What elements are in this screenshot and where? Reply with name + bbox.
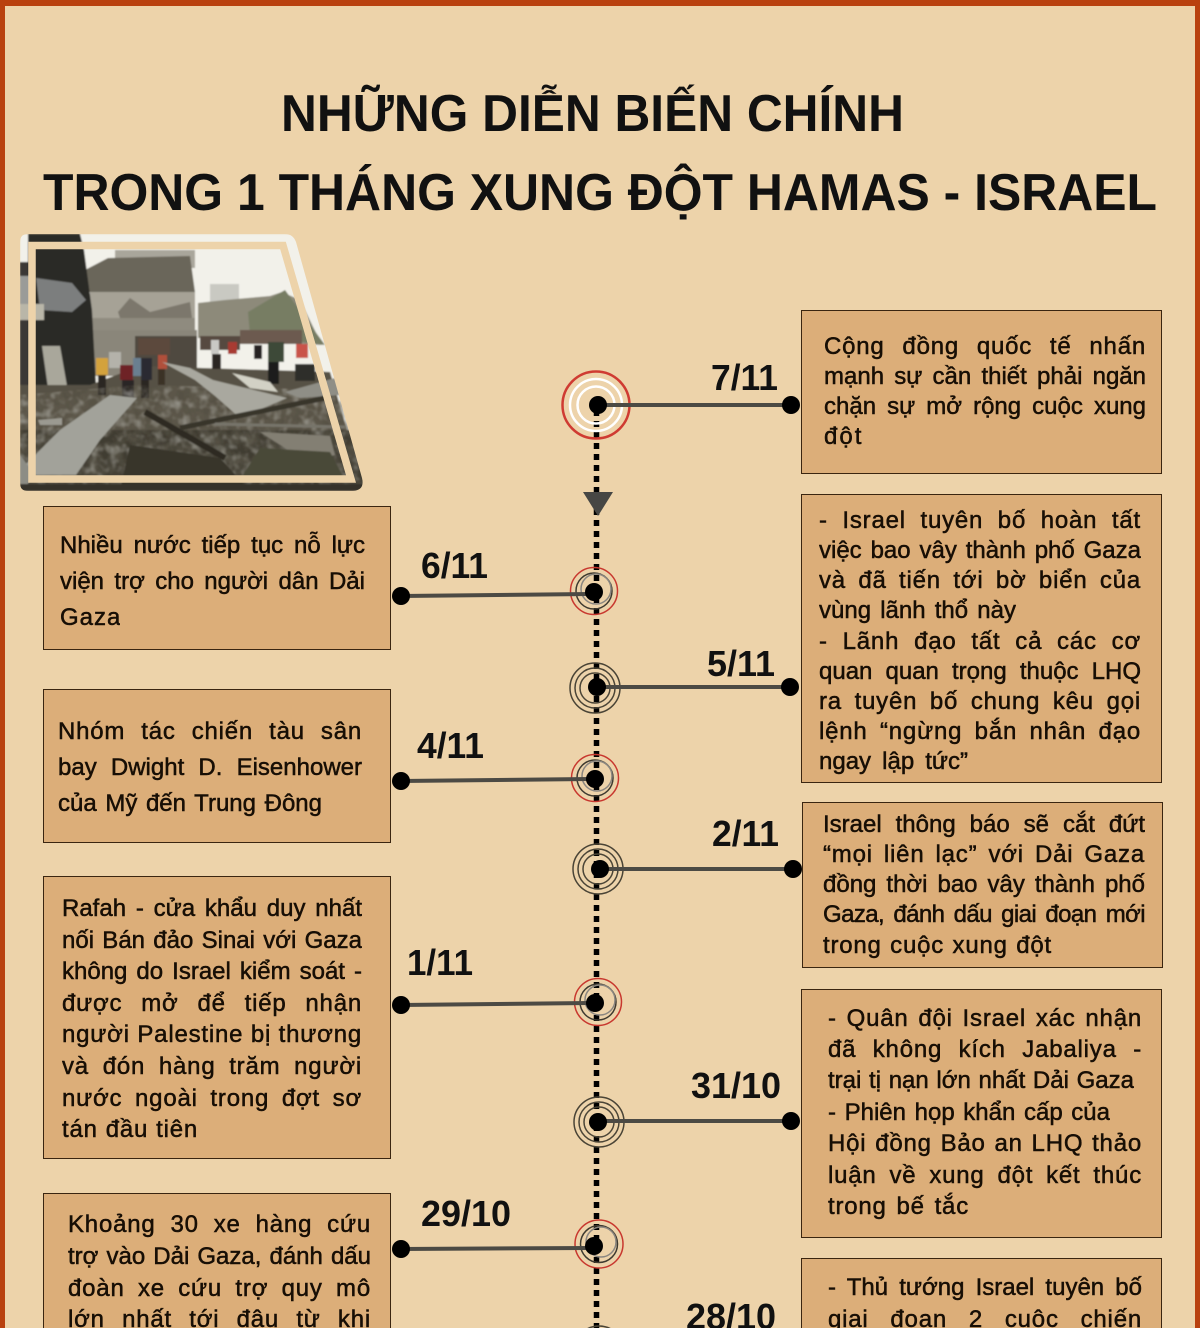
- panel: 5/11: ra tuyên bố chung kêu gọi: [819, 688, 1141, 715]
- panel: 1/11: và đón hàng trăm người: [62, 1053, 362, 1080]
- panel: 1/11: không do Israel kiểm soát -: [62, 958, 362, 985]
- panel: 4/11: của Mỹ đến Trung Đông: [58, 790, 322, 817]
- panel: 31/10: - Quân đội Israel xác nhận: [828, 1005, 1142, 1032]
- date: 29/10: 29/10: [421, 1193, 511, 1234]
- date: 6/11: 6/11: [421, 545, 488, 586]
- panel: 1/11: tán đầu tiên: [62, 1116, 198, 1143]
- panel: 2/11: trong cuộc xung đột: [823, 932, 1052, 959]
- panel: 7/11: đột: [824, 423, 863, 450]
- panel: 31/10: luận về xung đột kết thúc: [828, 1162, 1142, 1189]
- panel: 6/11: viện trợ cho người dân Dải: [60, 568, 365, 595]
- title: TRONG 1 THÁNG XUNG ĐỘT HAMAS - ISRAEL: [43, 163, 1157, 222]
- panel: 2/11: [802, 802, 1163, 968]
- panel: 4/11: Nhóm tác chiến tàu sân: [58, 718, 362, 745]
- panel: 1/11: Rafah - cửa khẩu duy nhất: [62, 895, 362, 922]
- panel: 5/11: việc bao vây thành phố Gaza: [819, 537, 1141, 564]
- photo: destroyed buildings in Gaza with frame: [20, 234, 365, 491]
- panel: 6/11: Gaza: [60, 604, 120, 631]
- title: [43, 84, 1157, 222]
- panel: 1/11: nước ngoài trong đợt sơ: [62, 1085, 362, 1112]
- panel: 5/11: quan quan trọng thuộc LHQ: [819, 658, 1141, 685]
- panel: 5/11: - Israel tuyên bố hoàn tất: [819, 507, 1141, 534]
- panel: 7/11: chặn sự mở rộng cuộc xung: [824, 393, 1146, 420]
- panel: 4/11: bay Dwight D. Eisenhower: [58, 754, 362, 781]
- node: 29/10: [392, 1220, 623, 1268]
- panel: 1/11: [43, 876, 391, 1159]
- node: 1/11: [392, 978, 622, 1026]
- date: 1/11: 1/11: [407, 942, 473, 983]
- metal sheets: [162, 362, 287, 418]
- panel: 5/11: [801, 494, 1162, 783]
- panel: 5/11: ngay lập tức”: [819, 748, 968, 775]
- panel: 31/10: [801, 989, 1162, 1238]
- node: 31/10: [574, 1097, 800, 1147]
- panel: 6/11: [43, 506, 391, 650]
- panel: 5/11: vùng lãnh thổ này: [819, 597, 1016, 624]
- panel: 29/10: [43, 1193, 391, 1328]
- panel: 5/11: - Lãnh đạo tất cả các cơ: [819, 628, 1141, 655]
- crowd: [96, 330, 315, 398]
- panel: 1/11: được mở để tiếp nhận: [62, 990, 362, 1017]
- node: 2/11: [573, 844, 802, 894]
- dotted timeline spine: [594, 410, 599, 1328]
- panel: 2/11: Israel thông báo sẽ cắt đứt: [823, 811, 1145, 838]
- panel: 29/10: đoàn xe cứu trợ quy mô: [68, 1275, 371, 1302]
- panel: 28/10: [801, 1258, 1162, 1328]
- node: 4/11: [392, 754, 618, 802]
- panel: 6/11: Nhiều nước tiếp tục nỗ lực: [60, 532, 365, 559]
- panel: 31/10: đã không kích Jabaliya -: [828, 1036, 1142, 1063]
- node: 28/10: [574, 1326, 624, 1328]
- node: 6/11: [392, 568, 618, 614]
- panel: 29/10: Khoảng 30 xe hàng cứu: [68, 1211, 371, 1238]
- title: NHỮNG DIỄN BIẾN CHÍNH: [281, 84, 904, 143]
- panel: 2/11: đồng thời bao vây thành phố: [823, 871, 1145, 898]
- panel: 31/10: trại tị nạn lớn nhất Dải Gaza: [828, 1067, 1134, 1094]
- arrow: time direction: [583, 492, 613, 516]
- panel: 31/10: trong bế tắc: [828, 1193, 969, 1220]
- panel: 31/10: - Phiên họp khẩn cấp của: [828, 1099, 1110, 1126]
- panel: 5/11: lệnh “ngừng bắn nhân đạo: [819, 718, 1141, 745]
- panel: 1/11: nối Bán đảo Sinai với Gaza: [62, 927, 362, 954]
- panel: 7/11: [801, 310, 1162, 474]
- date: 7/11: 7/11: [711, 357, 778, 398]
- panel: 2/11: “mọi liên lạc” với Dải Gaza: [823, 841, 1145, 868]
- panel: 29/10: trợ vào Dải Gaza, đánh dấu: [68, 1243, 371, 1270]
- panel: 4/11: [43, 689, 391, 843]
- date: 31/10: 31/10: [691, 1065, 781, 1106]
- node: 7/11: [562, 372, 800, 438]
- panel: 31/10: Hội đồng Bảo an LHQ thảo: [828, 1130, 1142, 1157]
- node: 5/11: [570, 663, 799, 713]
- panel: 7/11: mạnh sự cần thiết phải ngăn: [824, 363, 1146, 390]
- panel: 5/11: và đã tiến tới bờ biển của: [819, 567, 1141, 594]
- date: 5/11: 5/11: [707, 643, 775, 684]
- date: 4/11: 4/11: [417, 725, 484, 766]
- date: 2/11: 2/11: [712, 813, 779, 854]
- panel: 28/10: - Thủ tướng Israel tuyên bố: [828, 1274, 1142, 1301]
- panel: 2/11: Gaza, đánh dấu giai đoạn mới: [823, 901, 1145, 928]
- panel: 1/11: người Palestine bị thương: [62, 1021, 362, 1048]
- panel: 7/11: Cộng đồng quốc tế nhấn: [824, 333, 1146, 360]
